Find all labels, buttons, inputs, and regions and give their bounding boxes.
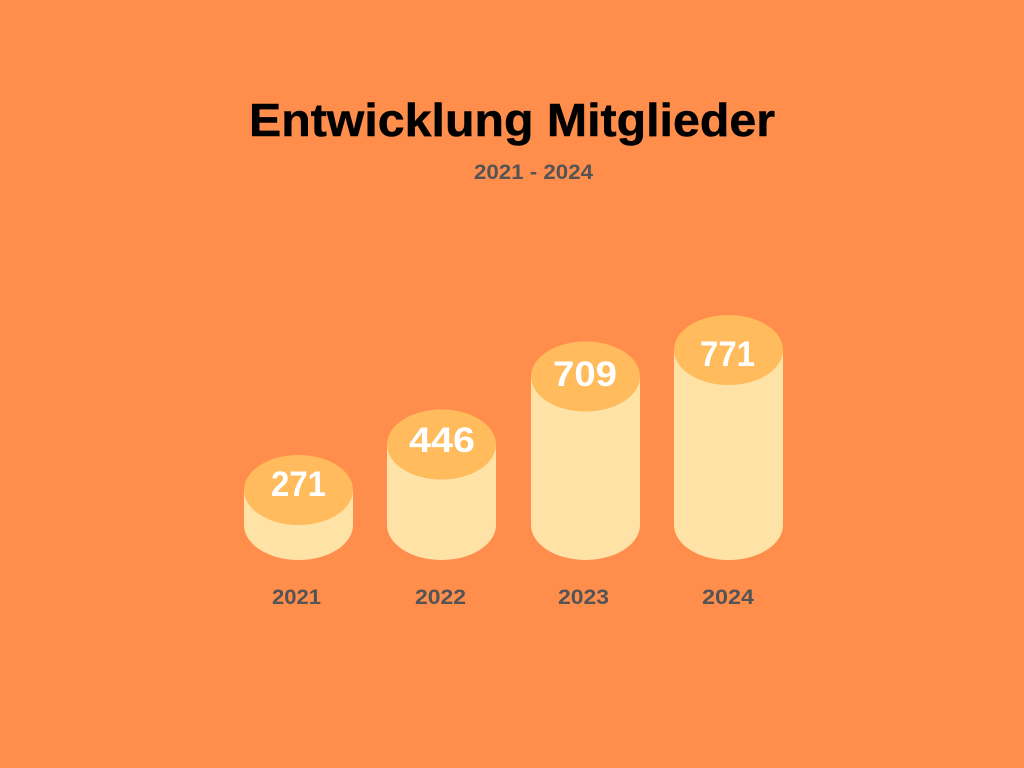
cylinder 2023: 709 [553, 355, 617, 394]
label 2022: 2022 [415, 586, 466, 609]
cylinder 2024: 771 [700, 335, 755, 374]
label 2021: 2021 [272, 586, 321, 609]
label 2024: 2024 [702, 586, 754, 609]
cylinder 2021 [244, 455, 353, 560]
cylinder 2021: 271 [271, 465, 326, 504]
cylinder 2024 [674, 315, 783, 560]
cylinder 2022: 446 [409, 421, 475, 460]
title: Entwicklung Mitglieder [249, 94, 775, 146]
cylinder 2022 [387, 410, 496, 560]
axis labels [272, 586, 754, 609]
label 2023: 2023 [558, 586, 609, 609]
cylinder 2023 [531, 342, 640, 560]
bar chart: cylinders [244, 315, 783, 560]
subtitle: 2021 - 2024 [474, 161, 593, 184]
